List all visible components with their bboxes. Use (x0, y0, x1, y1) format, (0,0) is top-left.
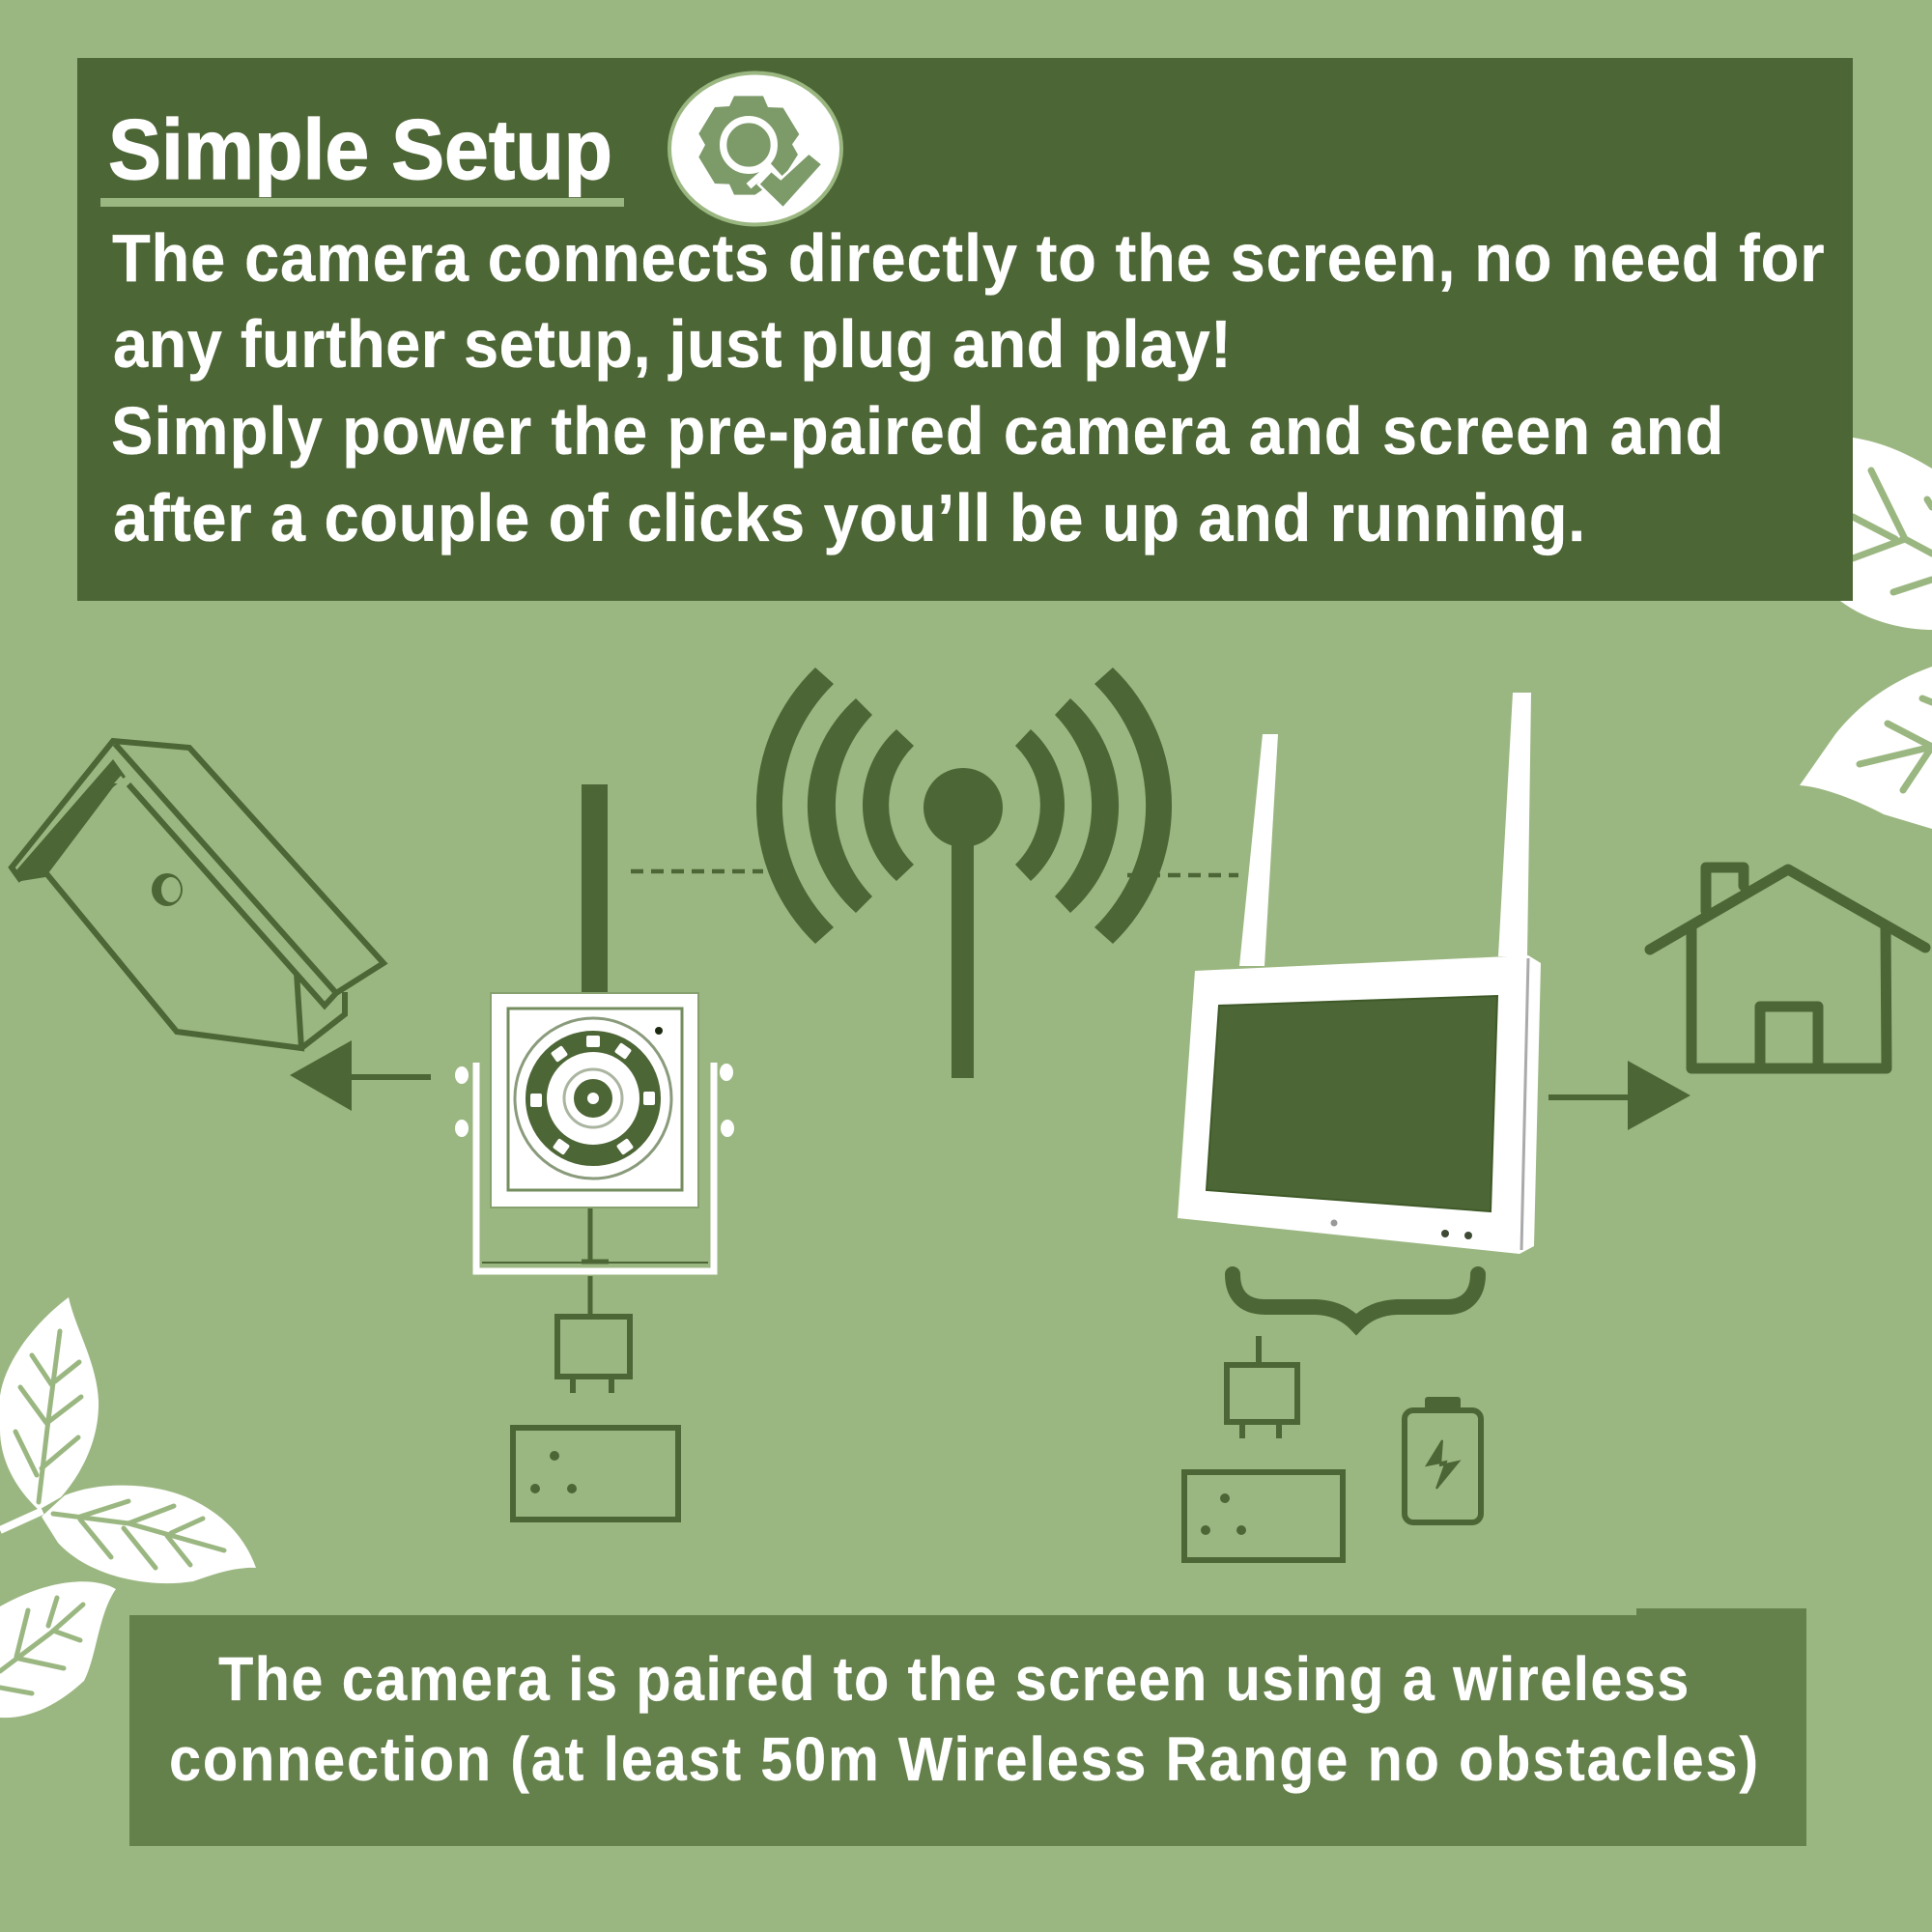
dashed wireless links (631, 871, 1238, 875)
icon: gear, magnifier and check (669, 73, 841, 224)
monitor antennas (1239, 693, 1531, 966)
power brace (1233, 1274, 1478, 1324)
arrow: towards house (1548, 1061, 1690, 1130)
wireless range text (169, 1645, 1758, 1794)
icon: top right leaf (1835, 435, 1932, 630)
panel: wireless range note (129, 1608, 1806, 1846)
camera antenna (582, 784, 608, 993)
icon: house (1650, 867, 1925, 1068)
camera power cable (582, 1208, 609, 1316)
body text (111, 221, 1825, 556)
camera body (491, 993, 698, 1208)
icon: battery (1405, 1397, 1481, 1522)
icon: bird box (12, 741, 384, 1048)
icon: bottom left leaves (0, 1297, 256, 1718)
monitor wall socket (1184, 1472, 1343, 1560)
camera plug (557, 1317, 630, 1393)
monitor plug (1227, 1336, 1297, 1438)
body text: Simply power the pre-paired camera and screen and (111, 394, 1723, 469)
wireless range text: connection (at least 50m Wireless Range no obstacles) (169, 1725, 1758, 1794)
monitor screen (1178, 693, 1541, 1254)
icon: middle right leaf (1800, 667, 1932, 829)
body text: any further setup, just plug and play! (113, 307, 1232, 383)
monitor body (1178, 955, 1541, 1254)
body text: The camera connects directly to the screen, no need for (112, 221, 1825, 297)
camera bracket (455, 1063, 734, 1271)
heading: Simple Setup (108, 101, 612, 197)
camera (455, 784, 734, 1520)
panel: simple setup (77, 58, 1853, 601)
body text: after a couple of clicks you’ll be up and running. (113, 481, 1585, 556)
camera wall socket (513, 1428, 678, 1520)
heading underline (100, 198, 624, 207)
arrow: towards bird box (290, 1040, 431, 1111)
icon: wireless signal mast (756, 668, 1172, 1078)
wireless range text: The camera is paired to the screen using a wireless (218, 1645, 1689, 1714)
